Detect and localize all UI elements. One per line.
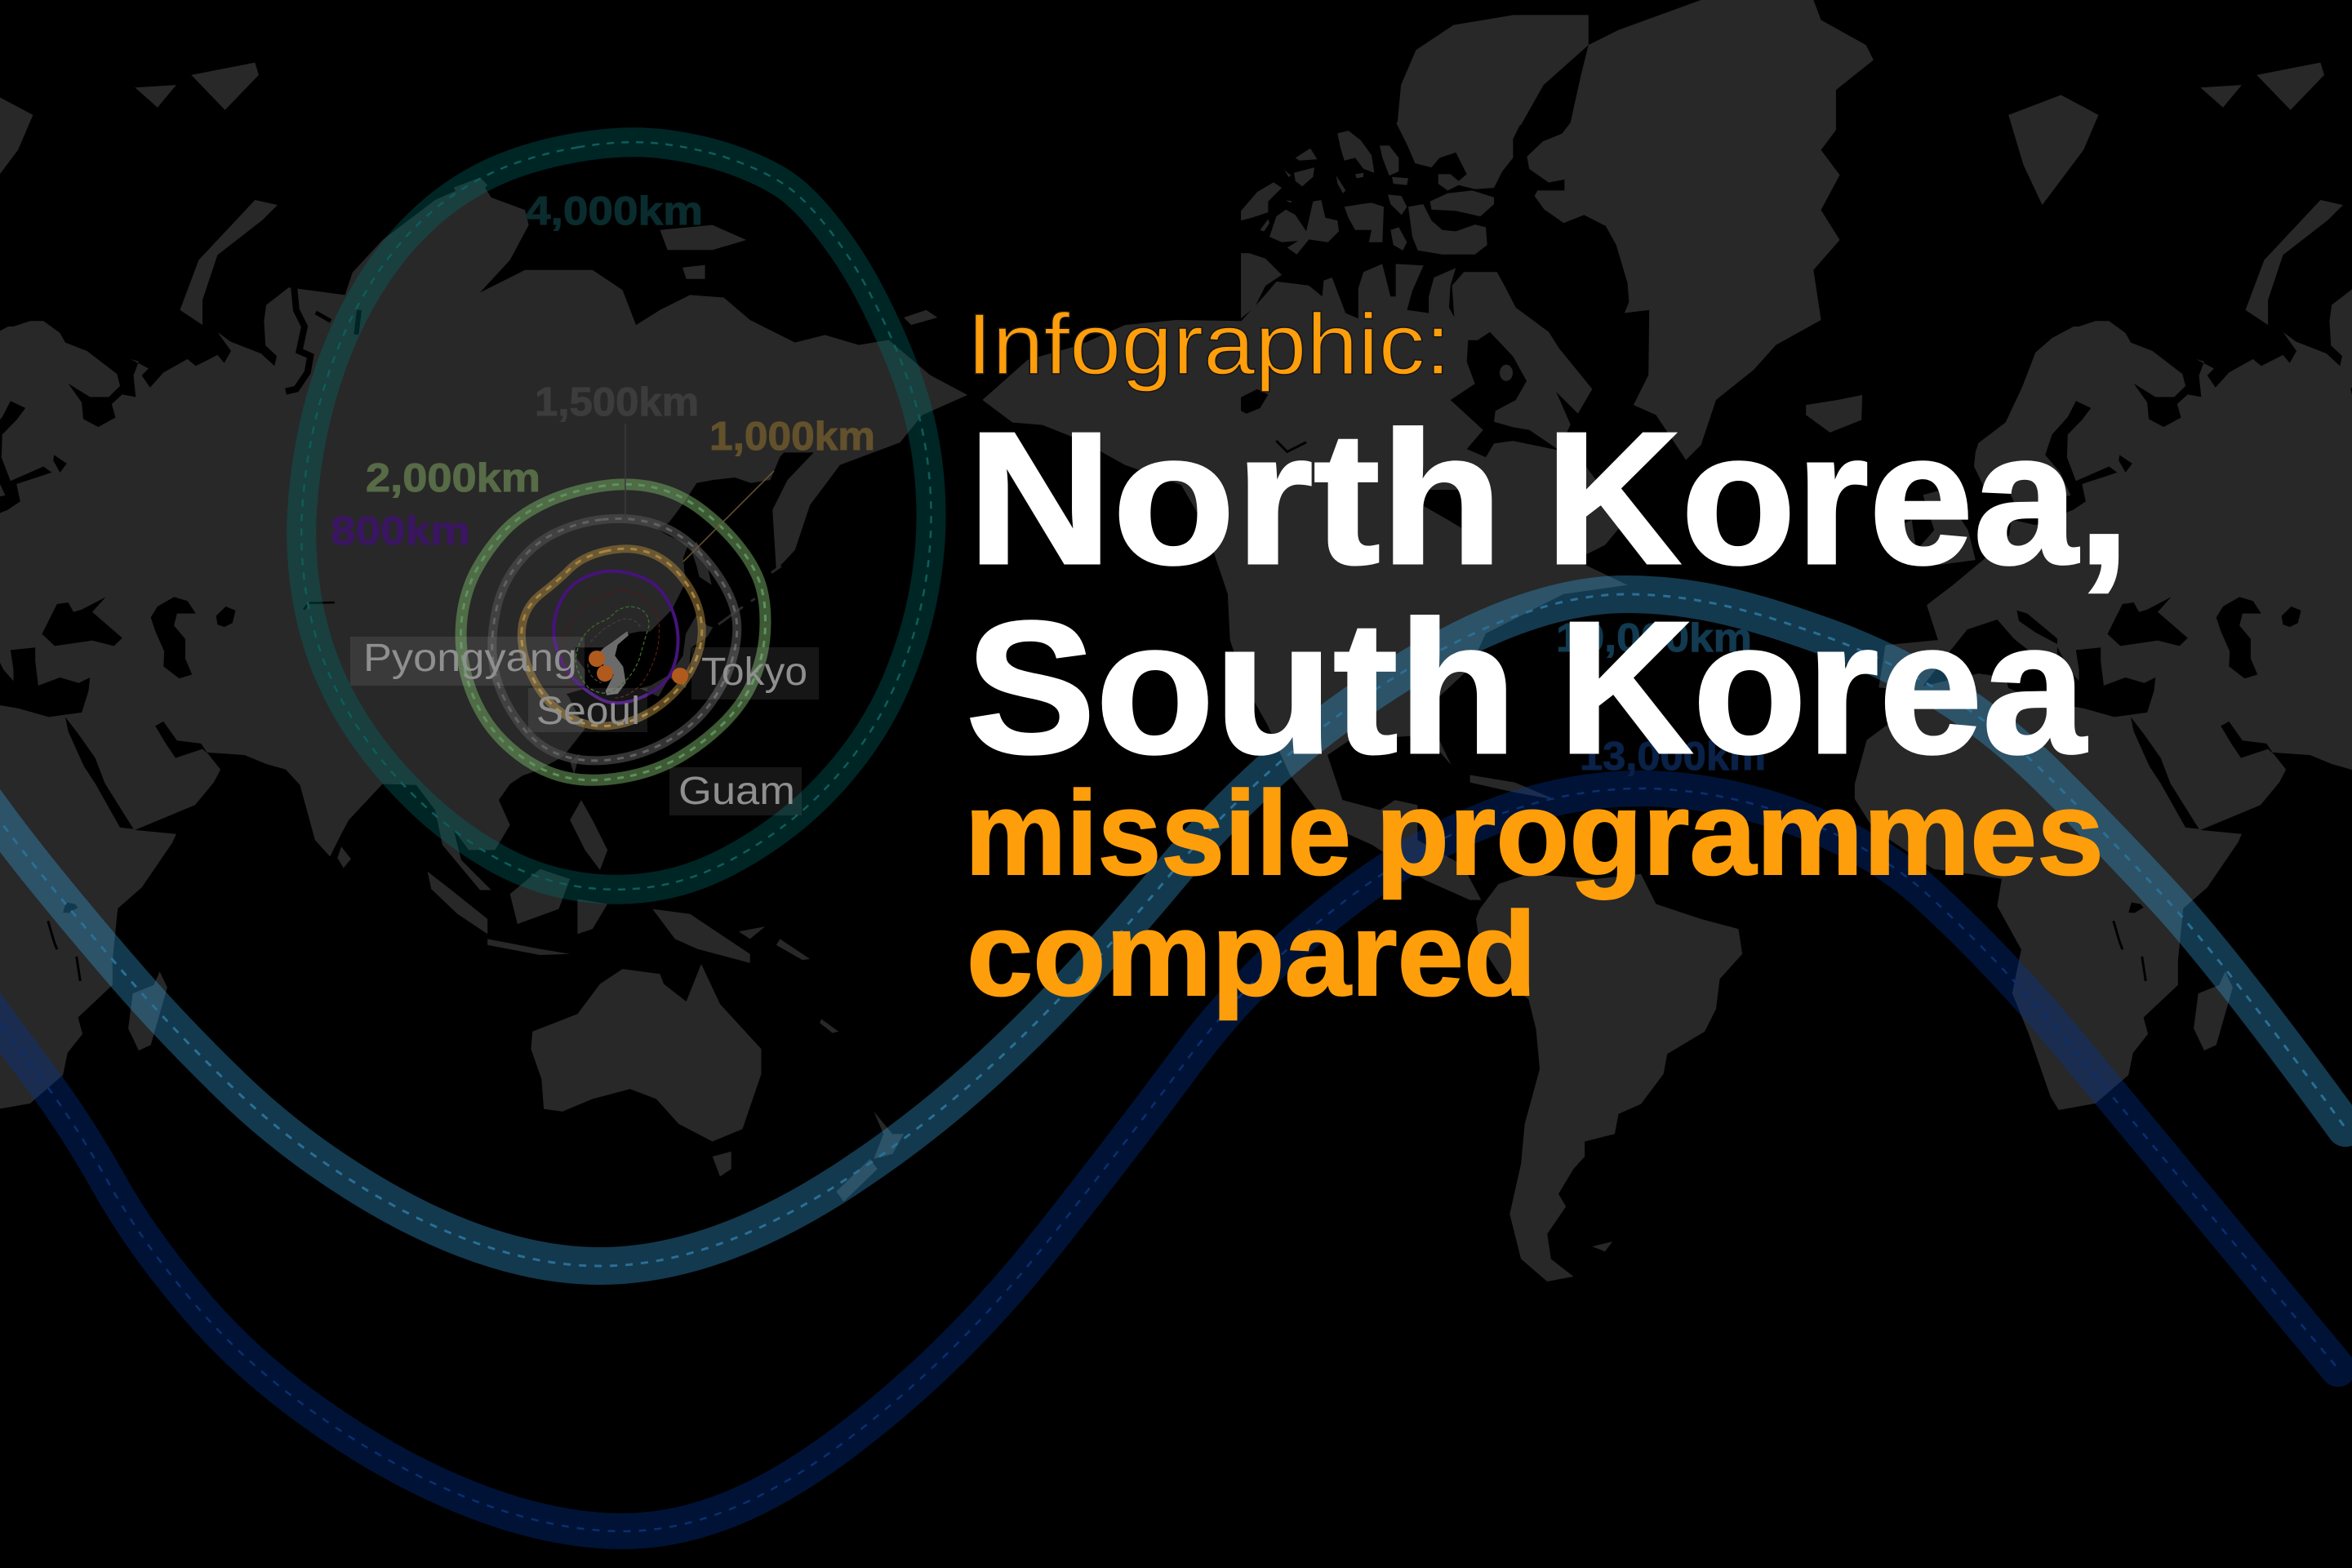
leader line: 1,500km: [625, 424, 626, 517]
2,000km range ring: [461, 484, 766, 780]
range label: 4,000km: 4,000km: [526, 189, 703, 233]
Siberian rivers and African rift lakes: [48, 287, 359, 981]
Philippines and Southeast Asian islands: [337, 800, 904, 1202]
Korean peninsula highlight: [598, 631, 629, 695]
subtitle line 1: [965, 766, 2104, 899]
Falkland Islands: [1592, 1242, 1612, 1251]
headline line 1: North: [967, 393, 1503, 603]
Canadian Arctic islands and Hudson Bay: [1241, 122, 1559, 528]
subtitle line 1: programmes: [1376, 766, 2104, 899]
10,000km range band: [0, 594, 2345, 1266]
range label: 10,000km: 10,000km: [1556, 616, 1752, 660]
Eurasia and Africa landmass: [0, 180, 967, 1110]
city label: Tokyo: [691, 647, 819, 700]
800km range ring: [554, 571, 678, 703]
4,000km range ring: [301, 142, 931, 890]
South America: [1476, 874, 1742, 1281]
headline line 2: South: [966, 582, 1517, 793]
city label: Guam: Guam: [678, 770, 795, 813]
New Zealand: [874, 1112, 904, 1159]
subtitle line 2: compared: [967, 887, 1536, 1020]
Australia and Tasmania: [531, 964, 761, 1141]
headline line 1: [967, 393, 2130, 603]
subtitle line 1: missile: [965, 766, 1351, 899]
repeated Europe and Africa at the right: [1855, 63, 2352, 1202]
range label: 800km: 800km: [331, 509, 470, 553]
1,000km range ring: [522, 549, 702, 726]
Madagascar: [128, 971, 167, 1051]
Sakhalin, Japan, Kuriles, Taiwan: [570, 541, 781, 774]
Arctic islands: [0, 95, 33, 205]
range label: 2,000km: 2,000km: [366, 456, 540, 500]
headline line 2: Korea: [1558, 582, 2087, 793]
leader line: 1,000km: [683, 471, 774, 562]
13,000km range band: [0, 788, 2338, 1531]
headline line 1: Korea,: [1545, 393, 2130, 603]
Ellesmere, Greenland and Iceland: [1398, 0, 1874, 460]
range label: 1,000km: 1,000km: [709, 415, 875, 459]
city label: Seoul: Seoul: [536, 690, 640, 733]
1,500km range ring: [492, 518, 737, 761]
title block: [965, 296, 2130, 1020]
range label: 1,500km: 1,500km: [535, 380, 699, 424]
city label: Pyongyang: Pyongyang: [363, 637, 577, 680]
Cuba: [1470, 775, 1556, 800]
range label: 13,000km: 13,000km: [1580, 735, 1766, 779]
North America: [982, 264, 1628, 900]
inland seas and lakes: [0, 401, 235, 913]
city markers: [589, 651, 688, 684]
city label: Tokyo: Tokyo: [701, 651, 807, 694]
headline line 2: [966, 582, 2087, 793]
short-range inner dotted rings: [562, 590, 659, 698]
kicker: Infographic:: [967, 296, 1451, 393]
